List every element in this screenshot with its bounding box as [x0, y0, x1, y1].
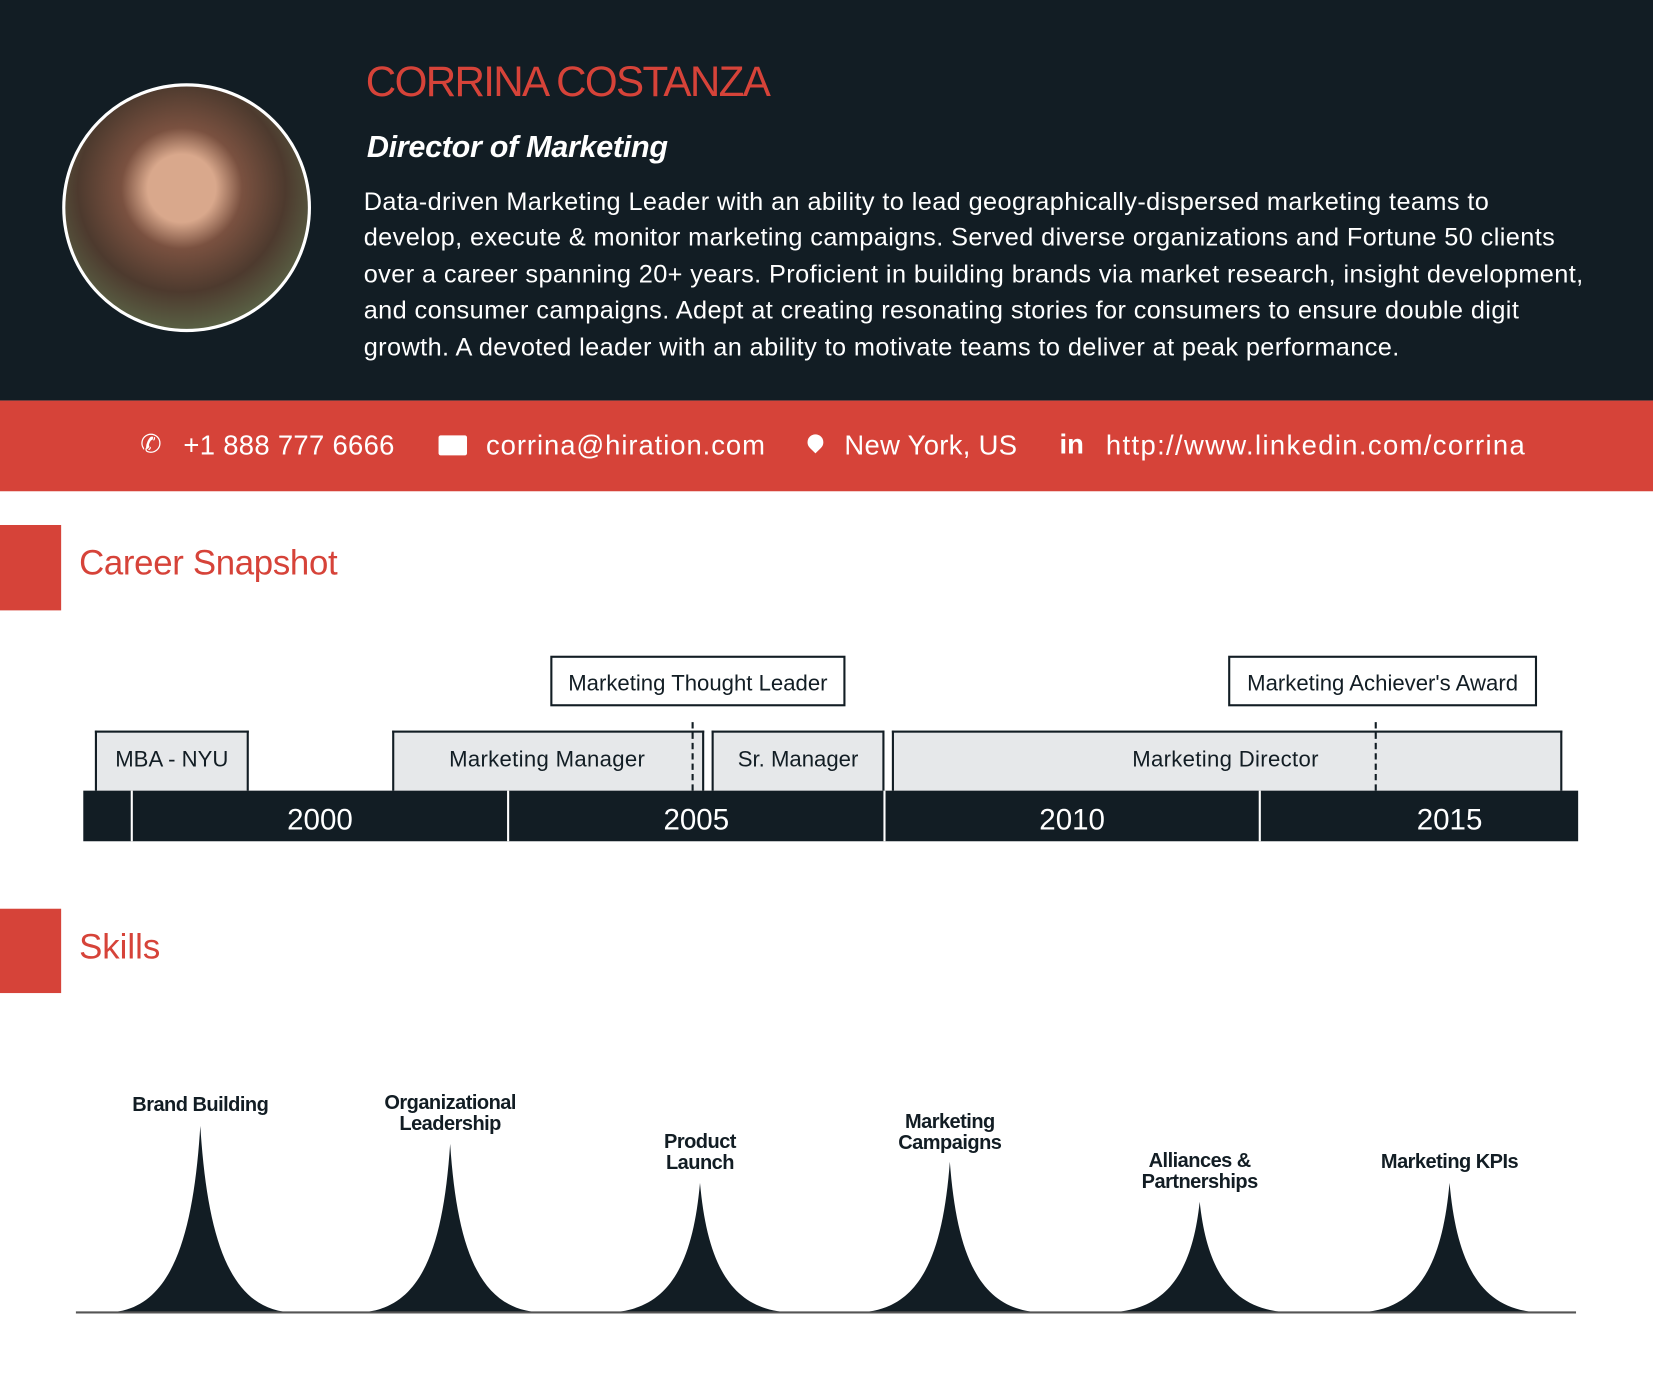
- award: thought leader: Marketing Thought Leader: [568, 672, 828, 696]
- contact bar: [0, 401, 1653, 491]
- peak: marketing campaigns: [855, 1111, 1045, 1312]
- dashed marker 1: [692, 722, 694, 791]
- award: thought leader: [550, 656, 845, 706]
- summary text: growth. A devoted leader with an ability to motivate teams to deliver at peak performance.: [364, 333, 1400, 361]
- peak: product launch: Product: [664, 1131, 737, 1153]
- email: corrina@hiration.com: [486, 429, 766, 461]
- role: MBA: [95, 731, 249, 791]
- section marker: career: [0, 525, 61, 610]
- year 2015: 2015: [1417, 803, 1482, 836]
- icon: linkedin: in: [1059, 428, 1084, 460]
- peak: marketing campaigns: Campaigns: [898, 1132, 1002, 1154]
- peak: alliances: [1105, 1150, 1295, 1312]
- name: CORRINA COSTANZA: [366, 59, 769, 105]
- photo: [62, 83, 311, 332]
- peak: product launch: [605, 1131, 795, 1312]
- role: MBA: MBA - NYU: [115, 747, 228, 772]
- peak: marketing campaigns: Marketing: [905, 1111, 995, 1133]
- award: achiever: Marketing Achiever's Award: [1247, 672, 1518, 696]
- summary text: and consumer campaigns. Adept at creating resonating stories for consumers to ensure double digit: [364, 296, 1519, 325]
- role: marketing director: Marketing Director: [1132, 747, 1319, 772]
- year 2005: 2005: [663, 803, 729, 836]
- header panel: [0, 0, 1653, 401]
- icon: email: [439, 435, 467, 455]
- skills chart: [76, 1092, 1576, 1314]
- heading: Skills: Skills: [79, 927, 160, 966]
- job title: Director of Marketing: [367, 131, 668, 164]
- dashed marker 2: [1375, 722, 1377, 791]
- role: marketing director: [892, 731, 1562, 791]
- role: sr manager: Sr. Manager: [738, 747, 858, 772]
- icon: phone: ✆: [140, 430, 161, 459]
- phone: +1 888 777 6666: [183, 429, 395, 461]
- year axis: [83, 791, 1578, 841]
- peak: product launch: Launch: [666, 1152, 734, 1174]
- peak: brand building: [105, 1094, 295, 1312]
- summary text: develop, execute & monitor marketing campaigns. Served diverse organizations and Fortune 50 clients: [364, 224, 1555, 252]
- peak: marketing KPIs: [1355, 1151, 1544, 1312]
- role: marketing manager: Marketing Manager: [449, 747, 645, 772]
- linkedin: http://www.linkedin.com/corrina: [1106, 429, 1526, 461]
- location: New York, US: [844, 429, 1017, 461]
- summary text: over a career spanning 20+ years. Proficient in building brands via market research, insight development,: [364, 260, 1584, 289]
- peak: organizational leadership: Organizational: [384, 1092, 516, 1114]
- year 2000: 2000: [287, 803, 353, 836]
- section marker: skills: [0, 909, 61, 993]
- peak: alliances: Partnerships: [1142, 1171, 1258, 1193]
- role: marketing manager: [392, 731, 704, 791]
- peak: alliances: Alliances &: [1149, 1150, 1251, 1172]
- year 2010: 2010: [1039, 803, 1105, 836]
- icon: location: [804, 431, 827, 453]
- peak: brand building: Brand Building: [132, 1094, 268, 1116]
- role: sr manager: [712, 731, 884, 791]
- award: achiever: [1228, 656, 1537, 706]
- timeline: [83, 656, 1578, 842]
- peak: organizational leadership: Leadership: [399, 1113, 501, 1135]
- summary text: Data-driven Marketing Leader with an ability to lead geographically-dispersed marketing teams to: [364, 188, 1489, 216]
- peak: organizational leadership: [355, 1092, 545, 1312]
- peak: marketing KPIs: Marketing KPIs: [1381, 1151, 1519, 1173]
- summary text: [364, 188, 1584, 361]
- heading: Career Snapshot: Career Snapshot: [79, 543, 337, 582]
